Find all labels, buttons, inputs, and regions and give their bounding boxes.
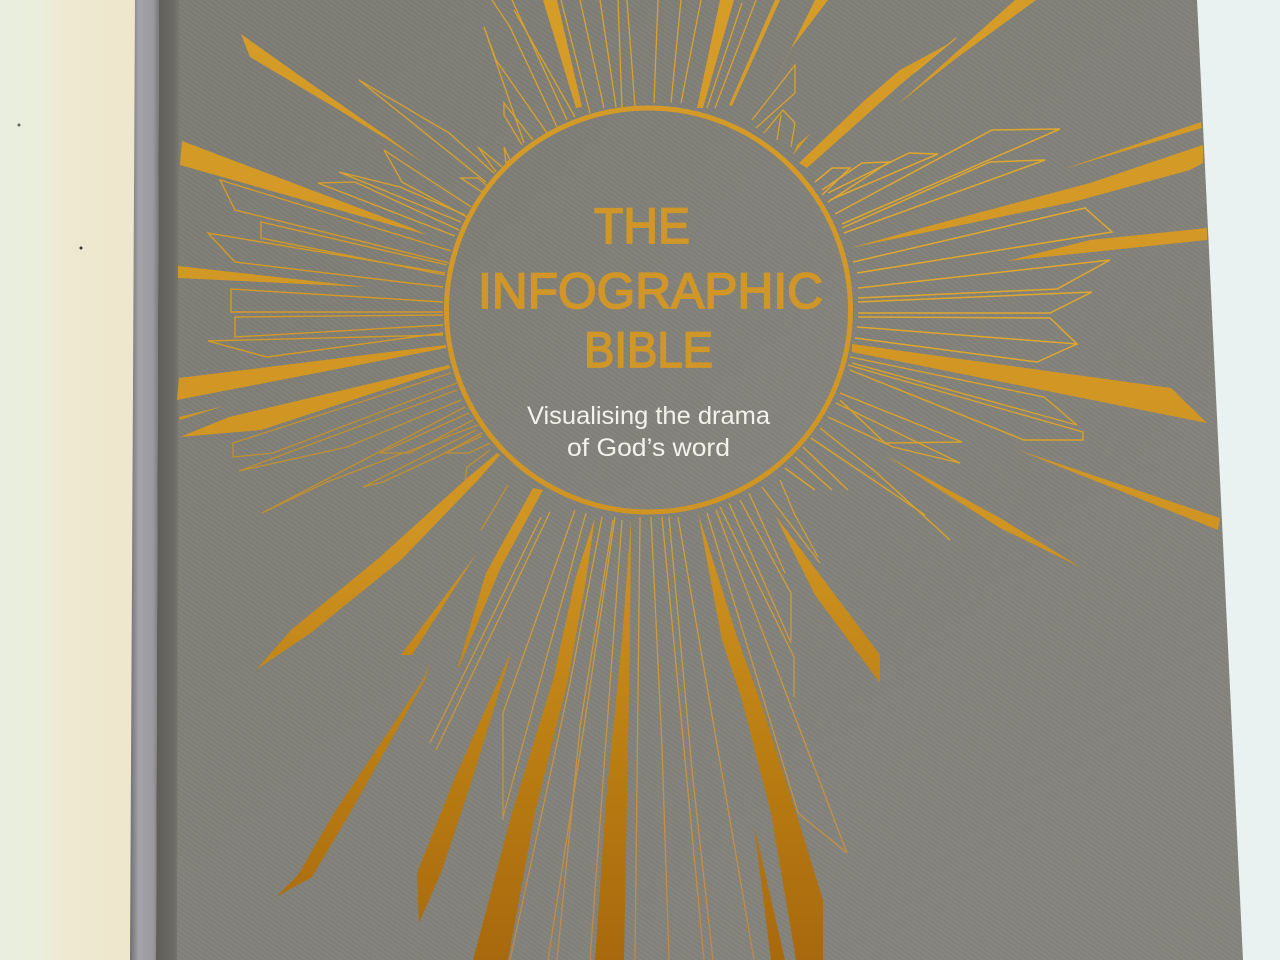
- outlined rays: top right: [654, 0, 956, 147]
- outlined rays: upper left: [318, 0, 635, 236]
- outlined rays: lower left: [233, 373, 508, 530]
- subtitle: Visualising the drama: [527, 402, 770, 430]
- subtitle: of God’s word: [567, 434, 730, 462]
- title: INFOGRAPHIC: [478, 263, 823, 319]
- cloth texture inside ring: [450, 111, 848, 509]
- book hinge: [156, 0, 181, 960]
- title: THE: [594, 198, 690, 254]
- book spine: [130, 0, 159, 960]
- outlined rays: bottom: [430, 480, 847, 960]
- title: BIBLE: [584, 322, 713, 378]
- title: [478, 198, 823, 378]
- central sun ring: [446, 108, 850, 512]
- outlined rays: lower right: [785, 357, 1083, 540]
- outlined rays: left: [208, 180, 451, 357]
- outlined rays: right: [815, 129, 1112, 362]
- subtitle: [527, 402, 770, 462]
